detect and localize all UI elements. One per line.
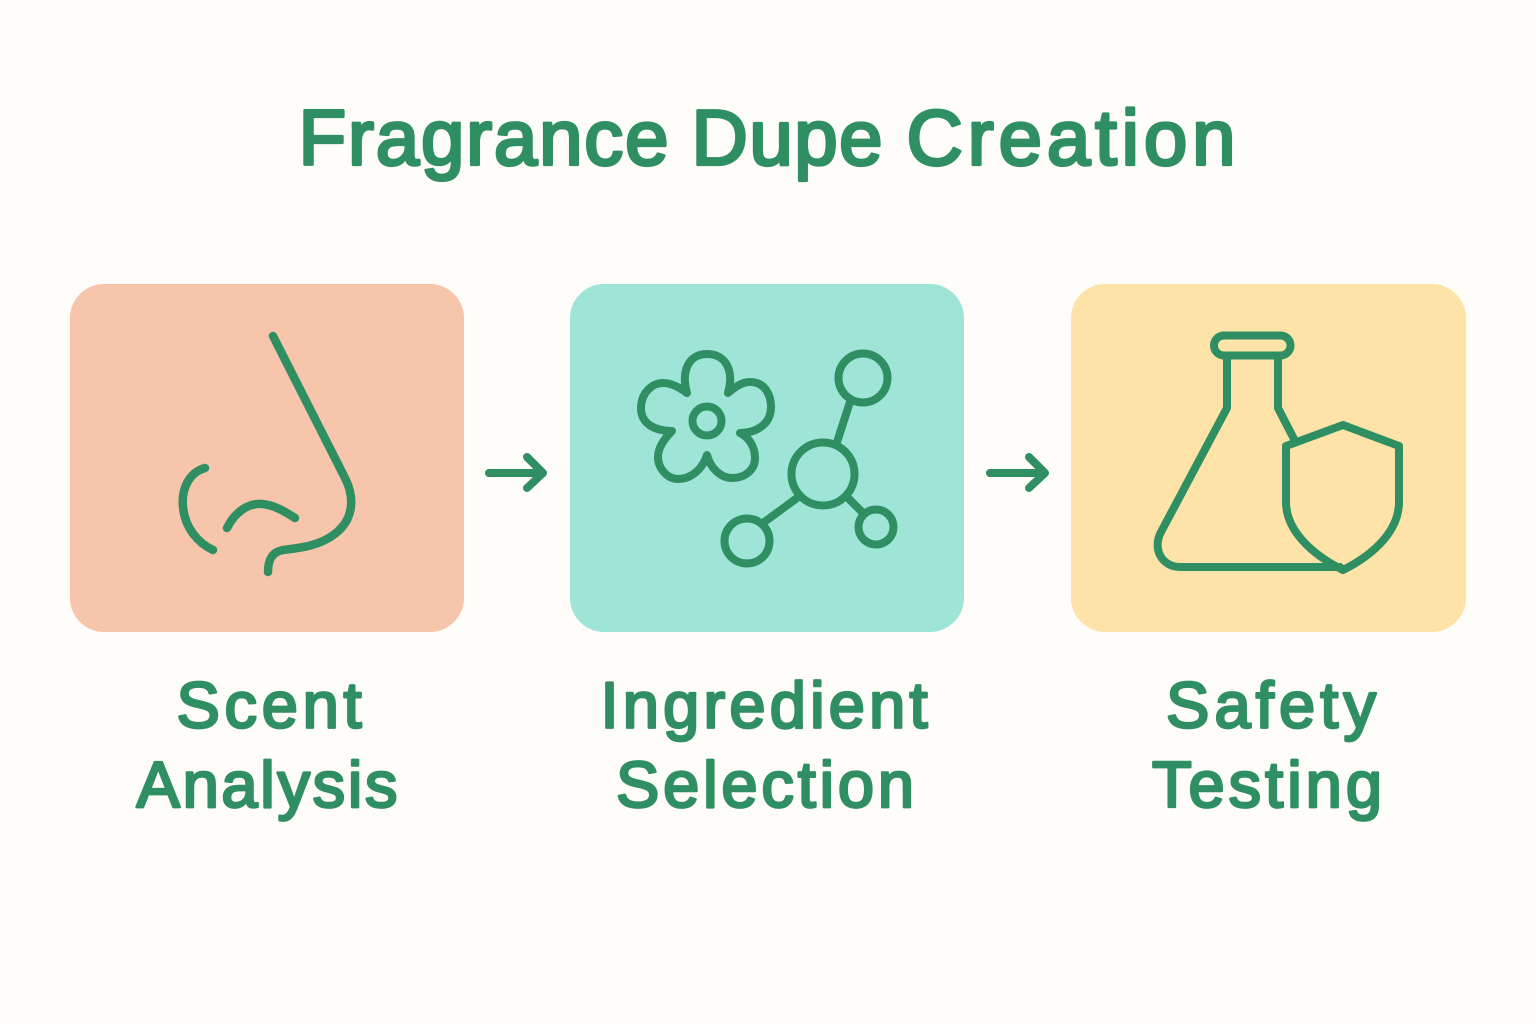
label: scent analysis: Scent <box>176 668 362 742</box>
icon: flower <box>641 354 771 479</box>
arrow: step 2 to 3 <box>990 457 1045 488</box>
panel: scent analysis <box>70 284 464 632</box>
panel background: peach <box>70 284 464 632</box>
icon: molecule <box>724 354 894 564</box>
arrow: step 1 to 2 <box>489 457 543 488</box>
icon: flask <box>1158 336 1340 567</box>
title: Fragrance <box>298 94 668 182</box>
icon: nose <box>183 336 351 572</box>
label: safety testing <box>1152 668 1382 821</box>
icon: shield <box>1286 425 1399 570</box>
label: ingredient selection: Ingredient <box>600 668 928 742</box>
panel: safety testing <box>1071 284 1466 632</box>
label: ingredient selection: Selection <box>616 748 914 821</box>
label: scent analysis <box>136 668 398 821</box>
label: safety testing: Safety <box>1166 668 1376 742</box>
label: ingredient selection <box>600 668 928 821</box>
panel background: mint <box>570 284 964 632</box>
panel: ingredient selection <box>570 284 964 632</box>
label: safety testing: Testing <box>1152 748 1382 821</box>
title: Creation <box>906 94 1236 182</box>
label: scent analysis: Analysis <box>136 748 398 821</box>
panel background: yellow <box>1071 284 1466 632</box>
title: Dupe <box>692 94 882 182</box>
title <box>298 94 1236 182</box>
